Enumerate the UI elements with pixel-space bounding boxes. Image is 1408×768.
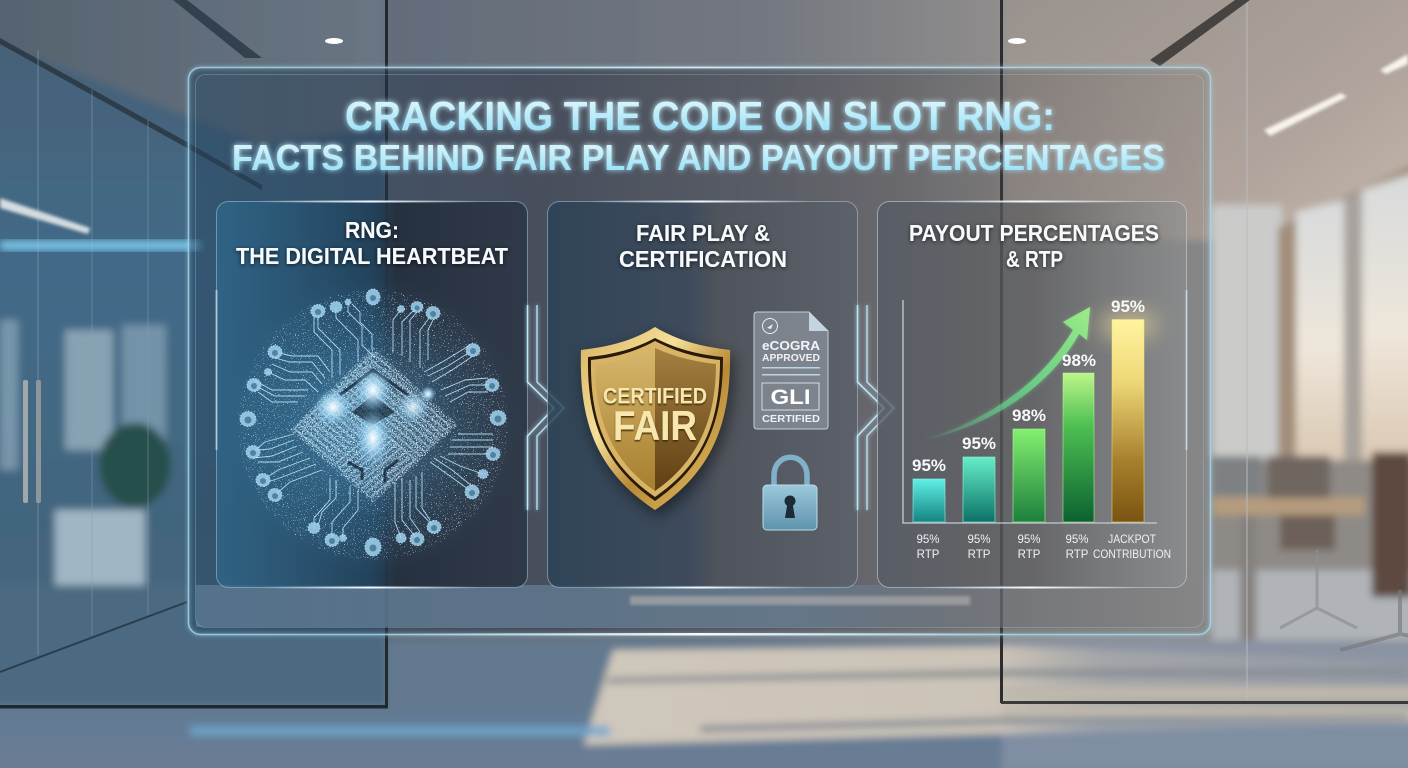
panel highlights: [216, 200, 1188, 588]
heading: payout: & RTP: [1006, 246, 1063, 272]
icon: certificate document: APPROVED: [762, 352, 820, 364]
panel background RNG: [216, 202, 528, 588]
axis labels: 95%: [967, 534, 991, 546]
axis labels: RTP: [1018, 549, 1041, 561]
axis labels: 95%: [1065, 534, 1089, 546]
icon: certificate document: GLI: [770, 386, 810, 409]
value labels: 98%: [1012, 406, 1046, 425]
title: [232, 93, 1165, 178]
axes: [903, 300, 1157, 523]
value labels: 95%: [1111, 297, 1145, 316]
title: FACTS BEHIND FAIR PLAY AND PAYOUT PERCENTAGES: [232, 137, 1165, 178]
heading: RNG: [236, 217, 508, 269]
bars: [913, 320, 1144, 522]
value labels: [912, 297, 1145, 475]
glow behind gold bar: [1098, 309, 1158, 341]
icon: certificate document: [754, 312, 828, 429]
value labels: 95%: [912, 456, 946, 475]
shield text: CERTIFIED: [603, 384, 707, 408]
growth arrow: [915, 307, 1091, 442]
heading: payout: PAYOUT PERCENTAGES: [909, 220, 1159, 246]
title: CRACKING THE CODE ON SLOT RNG:: [345, 93, 1055, 139]
icon: gold shield: [581, 327, 730, 510]
axis labels: JACKPOT: [1108, 534, 1156, 546]
axis labels: CONTRIBUTION: [1093, 549, 1171, 561]
main glass frame: [188, 66, 1210, 636]
shield text: FAIR: [613, 402, 697, 449]
panel background fair play: [548, 202, 858, 588]
axis labels: RTP: [917, 549, 940, 561]
panel: payout: [878, 202, 1186, 588]
axis labels: RTP: [968, 549, 991, 561]
value labels: 95%: [962, 434, 996, 453]
panel: fair play: [548, 202, 858, 588]
connector arrow 2: [858, 305, 894, 510]
heading: payout: [909, 220, 1159, 272]
icon: certificate document: CERTIFIED: [762, 413, 820, 425]
heading: fair play: CERTIFICATION: [619, 246, 787, 272]
axis labels: 95%: [916, 534, 940, 546]
panel background payout: [878, 202, 1186, 588]
heading: fair play: [619, 220, 787, 272]
shield text: [603, 384, 707, 449]
axis labels: 95%: [1017, 534, 1041, 546]
icon: padlock: [763, 457, 817, 530]
axis labels: [916, 534, 1171, 561]
icon: certificate document: eCOGRA: [762, 338, 821, 353]
heading: fair play: FAIR PLAY &: [636, 220, 770, 246]
heading: RNG: THE DIGITAL HEARTBEAT: [236, 243, 508, 269]
icon: circuit chip: [223, 275, 523, 575]
axis labels: RTP: [1066, 549, 1089, 561]
connector arrow 1: [528, 305, 564, 510]
bar chart: [903, 297, 1171, 561]
heading: RNG: RNG:: [345, 217, 399, 243]
value labels: 98%: [1062, 351, 1096, 370]
panel: RNG: [216, 202, 528, 588]
